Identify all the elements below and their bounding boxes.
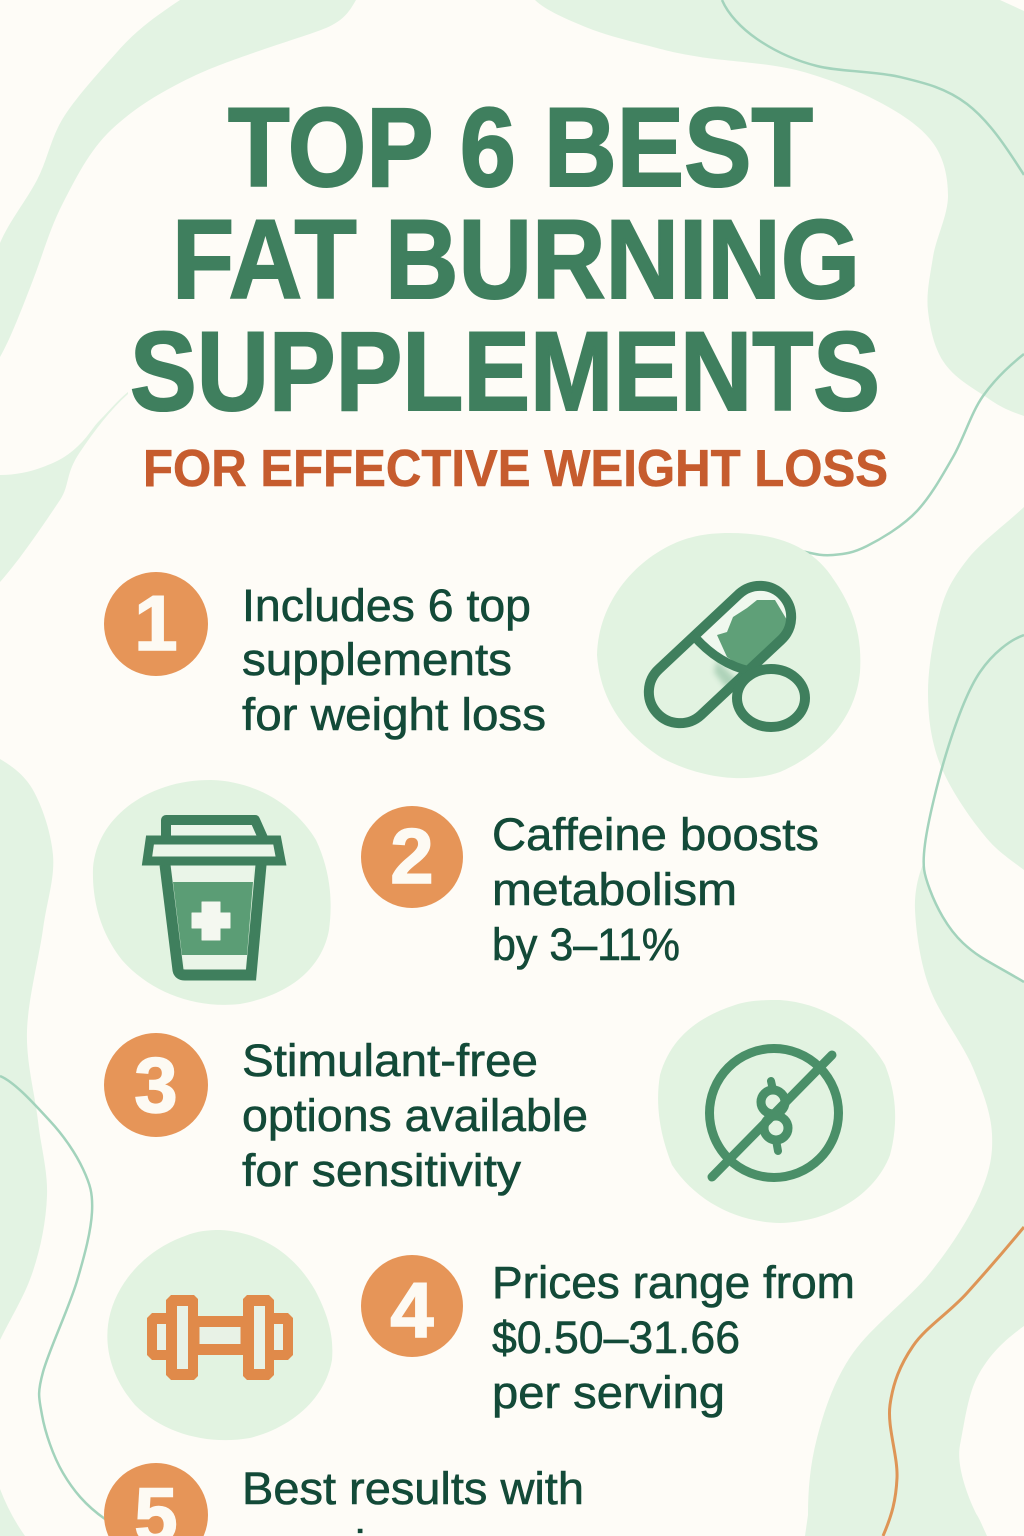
number badge 4: 4 xyxy=(390,1266,434,1354)
number badge 1: 1 xyxy=(134,579,178,667)
panel: item 3 xyxy=(104,1000,895,1223)
icon: crossed-out stimulant symbol xyxy=(658,1000,895,1223)
text: item 5: Best results with xyxy=(242,1463,584,1514)
title: FAT BURNING xyxy=(172,197,860,322)
text: item 2 xyxy=(492,809,819,970)
subtitle: FOR EFFECTIVE WEIGHT LOSS xyxy=(143,440,888,498)
panel: item 2 xyxy=(93,780,819,1005)
text: item 2: by 3–11% xyxy=(492,919,680,970)
number badge 3: 3 xyxy=(134,1041,178,1129)
text: item 3 xyxy=(242,1035,588,1196)
panel: item 1 xyxy=(104,533,860,778)
text: item 3: Stimulant-free xyxy=(242,1035,538,1086)
icon: dumbbell xyxy=(107,1230,332,1440)
text: item 5 xyxy=(242,1463,584,1536)
number badge 2: 2 xyxy=(390,812,434,900)
panel: item 5 xyxy=(104,1463,584,1536)
text: item 1: Includes 6 top xyxy=(242,580,531,631)
title: TOP 6 BEST xyxy=(228,85,813,210)
text: item 1 xyxy=(242,580,546,740)
icon: takeaway cup with cross xyxy=(93,780,331,1005)
text: item 1: for weight loss xyxy=(242,689,546,740)
icon: capsule and pill xyxy=(597,533,860,778)
number badge 4 xyxy=(361,1255,463,1357)
text: item 3: for sensitivity xyxy=(242,1145,522,1196)
number badge 1 xyxy=(104,572,208,676)
text: item 1: supplements xyxy=(242,634,512,685)
number badge 5 xyxy=(104,1463,208,1536)
number badge 2 xyxy=(361,806,463,908)
text: item 4 xyxy=(492,1257,855,1418)
text: item 4: Prices range from xyxy=(492,1257,855,1308)
title: SUPPLEMENTS xyxy=(130,309,880,434)
text: item 2: Caffeine boosts xyxy=(492,809,819,860)
title xyxy=(130,85,880,434)
number badge 3 xyxy=(104,1033,208,1137)
text: item 2: metabolism xyxy=(492,864,737,915)
panel: item 4 xyxy=(107,1230,855,1440)
text: item 3: options available xyxy=(242,1090,588,1141)
text: item 4: $0.50–31.66 xyxy=(492,1312,740,1363)
text: item 4: per serving xyxy=(492,1367,725,1418)
